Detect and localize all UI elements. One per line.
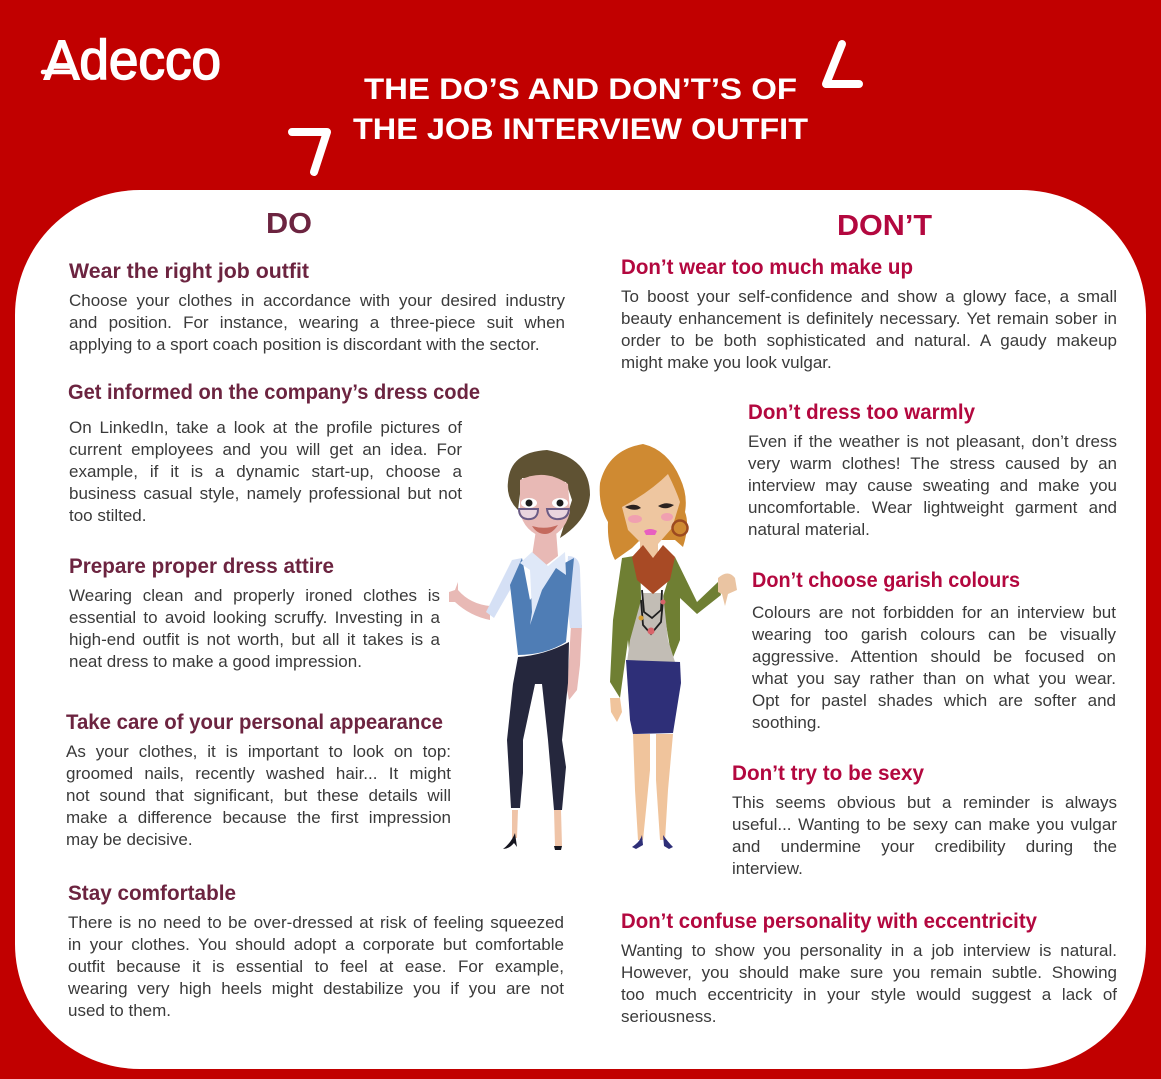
tip: wear the right outfit: and position. For instance, wearing a three-piece suit when bbox=[69, 313, 565, 332]
tip: garish colours: soothing. bbox=[752, 713, 821, 732]
tip: too much make up: To boost your self-confidence and show a glowy face, a small bbox=[621, 287, 1117, 306]
tip: company dress code: example, if it is a dynamic start-up, choose a bbox=[69, 462, 462, 481]
logo: Adecco: Adecco bbox=[44, 28, 221, 90]
tip: eccentricity bbox=[621, 910, 1117, 1026]
tip: wear the right outfit: applying to a sport coach position is discordant with the sector. bbox=[69, 335, 540, 354]
tip: garish colours: Opt for pastel shades which are softer and bbox=[752, 691, 1116, 710]
tip: eccentricity: seriousness. bbox=[621, 1007, 716, 1026]
white content panel bbox=[15, 190, 1146, 1069]
tip: personal appearance bbox=[66, 711, 451, 849]
title: THE JOB INTERVIEW OUTFIT bbox=[353, 113, 808, 146]
tip: eccentricity: Wanting to show you personality in a job interview is natural. bbox=[621, 941, 1117, 960]
illustration: two women bbox=[449, 444, 737, 850]
icon: top-right quote corner bbox=[822, 40, 863, 88]
woman disapproving bbox=[600, 444, 737, 849]
tip: company dress code: business casual style, namely professional but not bbox=[69, 484, 462, 503]
tip: wear the right outfit: Choose your clothes in accordance with your desired industry bbox=[69, 291, 565, 310]
tip: too warmly: natural material. bbox=[748, 520, 870, 539]
tip: garish colours: aggressive. Attention should be focused on bbox=[752, 647, 1116, 666]
tip: too warmly: Even if the weather is not pleasant, don’t dress bbox=[748, 432, 1117, 451]
icon: bottom-left quote corner bbox=[288, 128, 331, 176]
tip: sexy bbox=[732, 762, 1117, 878]
tip: proper dress attire bbox=[69, 555, 440, 671]
woman approving bbox=[449, 450, 590, 850]
tip: stay comfortable: used to them. bbox=[68, 1001, 171, 1020]
tip: company dress code: Get informed on the company’s dress code bbox=[68, 381, 480, 404]
tip: garish colours: Don’t choose garish colours bbox=[752, 569, 1020, 592]
tip: proper dress attire: Wearing clean and properly ironed clothes is bbox=[69, 586, 440, 605]
tip: eccentricity: Don’t confuse personality with eccentricity bbox=[621, 910, 1037, 933]
tip: proper dress attire: Prepare proper dress attire bbox=[69, 555, 334, 578]
panel: DON'T list bbox=[621, 256, 1117, 1026]
tip: sexy: useful... Wanting to be sexy can make you vulgar bbox=[732, 815, 1117, 834]
tip: sexy: interview. bbox=[732, 859, 803, 878]
tip: too warmly: interview may cause sweating and make you bbox=[748, 476, 1117, 495]
title bbox=[353, 73, 808, 146]
tip: garish colours: what you say rather than on what you wear. bbox=[752, 669, 1116, 688]
tip: too much make up: beauty enhancement is definitely necessary. Yet remain sober in bbox=[621, 309, 1117, 328]
heading: DON'T: DON’T bbox=[837, 210, 932, 242]
tip: personal appearance: groomed nails, recently washed hair... It might bbox=[66, 764, 451, 783]
tip: eccentricity: However, you should make sure you remain subtle. Showing bbox=[621, 963, 1117, 982]
tip: garish colours bbox=[752, 569, 1116, 732]
tip: too much make up: might make you look vulgar. bbox=[621, 353, 832, 372]
tip: sexy: Don’t try to be sexy bbox=[732, 762, 924, 785]
tip: too much make up bbox=[621, 256, 1117, 372]
tip: company dress code: On LinkedIn, take a look at the profile pictures of bbox=[69, 418, 462, 437]
tip: proper dress attire: neat dress to make a good impression. bbox=[69, 652, 362, 671]
tip: personal appearance: make a difference because the first impression bbox=[66, 808, 451, 827]
tip: company dress code: current employees and you will get an idea. For bbox=[69, 440, 462, 459]
tip: personal appearance: Take care of your personal appearance bbox=[66, 711, 443, 734]
tip: eccentricity: too much eccentricity in your style would suggest a lack of bbox=[621, 985, 1117, 1004]
tip: garish colours: Colours are not forbidden for an interview but bbox=[752, 603, 1116, 622]
tip: personal appearance: not sound that significant, but these details will bbox=[66, 786, 451, 805]
tip: proper dress attire: high-end outfit is not worth, but all it takes is a bbox=[69, 630, 440, 649]
panel: DO list bbox=[66, 260, 565, 1020]
tip: too warmly: very warm clothes! The stress caused by an bbox=[748, 454, 1117, 473]
tip: company dress code bbox=[68, 381, 480, 525]
tip: stay comfortable: Stay comfortable bbox=[68, 882, 236, 905]
tip: personal appearance: As your clothes, it is important to look on top: bbox=[66, 742, 451, 761]
tip: stay comfortable: outfit because it is essential to feel at ease. For example, bbox=[68, 957, 564, 976]
tip: wear the right outfit: Wear the right job outfit bbox=[69, 260, 309, 283]
tip: stay comfortable bbox=[68, 882, 564, 1020]
tip: wear the right outfit bbox=[69, 260, 565, 354]
tip: too warmly bbox=[748, 401, 1117, 539]
tip: sexy: This seems obvious but a reminder is always bbox=[732, 793, 1117, 812]
tip: personal appearance: may be decisive. bbox=[66, 830, 193, 849]
tip: proper dress attire: essential to avoid looking scruffy. Investing in a bbox=[69, 608, 440, 627]
tip: company dress code: too stilted. bbox=[69, 506, 146, 525]
tip: garish colours: wearing too garish colours can be visually bbox=[752, 625, 1116, 644]
tip: sexy: and undermine your credibility during the bbox=[732, 837, 1117, 856]
heading: DO: DO bbox=[266, 208, 312, 240]
tip: stay comfortable: wearing very high heels might destabilize you if you are not bbox=[68, 979, 564, 998]
tip: too warmly: Don’t dress too warmly bbox=[748, 401, 975, 424]
tip: stay comfortable: in your clothes. You should adopt a corporate but comfortable bbox=[68, 935, 564, 954]
tip: too much make up: order to be both sophisticated and natural. A gaudy makeup bbox=[621, 331, 1117, 350]
tip: too warmly: uncomfortable. Wear lightweight garment and bbox=[748, 498, 1117, 517]
tip: stay comfortable: There is no need to be over-dressed at risk of feeling squeezed bbox=[68, 913, 564, 932]
title: THE DO’S AND DON’T’S OF bbox=[364, 73, 797, 106]
tip: too much make up: Don’t wear too much make up bbox=[621, 256, 913, 279]
